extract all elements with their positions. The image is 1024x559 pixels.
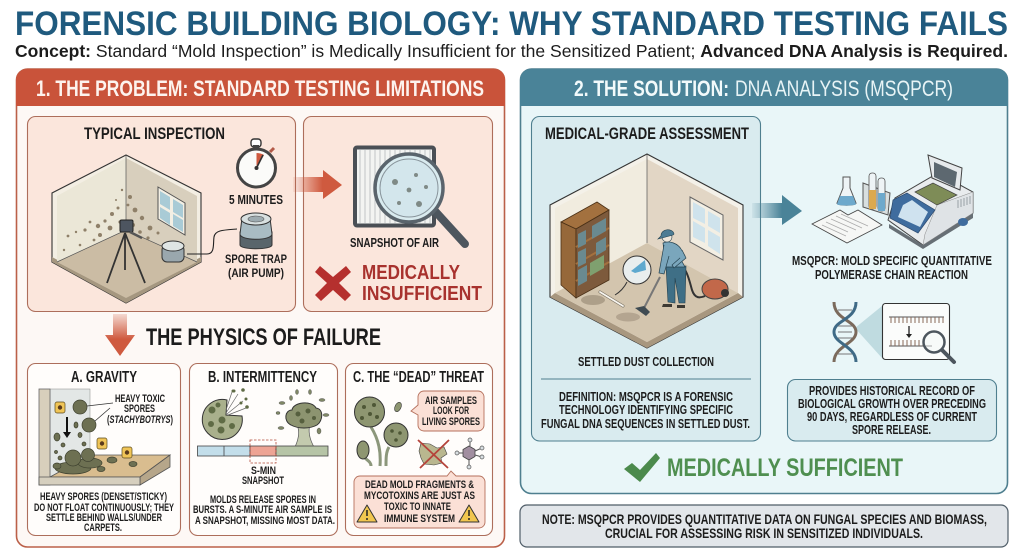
panel frame: problem: [16, 69, 504, 547]
text: historical record box: SPORE RELEASE.: [852, 422, 931, 437]
arrow: trap connector: [187, 229, 237, 254]
icon: green check: [624, 453, 660, 482]
panel: typical inspection: [28, 116, 296, 312]
label: msqpcr definition: [792, 254, 992, 282]
text: intermittency caption: A SNAPSHOT, MISSING MOST DATA.: [195, 515, 335, 527]
panel box: intermittency: [190, 364, 338, 536]
icon: warning right: [459, 505, 479, 522]
note box: CRUCIAL FOR ASSESSING RISK IN SENSITIZED INDIVIDUALS.: [605, 525, 923, 541]
heading: typical inspection: TYPICAL INSPECTION: [84, 125, 225, 143]
label: spore trap: [225, 252, 287, 280]
heading: dead threat: C. THE “DEAD” THREAT: [353, 369, 484, 386]
text: gravity caption: CARPETS.: [84, 522, 122, 534]
icon: mycotoxin molecule: [455, 438, 484, 469]
label: heavy toxic spores: [107, 393, 173, 426]
heading: physics of failure: THE PHYSICS OF FAILURE: [146, 324, 381, 351]
label: heavy toxic spores: SPORES: [124, 403, 155, 415]
label: heavy toxic spores: HEAVY TOXIC: [115, 393, 165, 405]
panel: B intermittency: [190, 364, 338, 536]
callout: dead mold fragments warning: [354, 471, 485, 528]
panel header: problem: [16, 69, 505, 106]
callout: dead mold fragments warning: TOXIC TO INNATE: [384, 501, 451, 513]
icon: red x: [315, 266, 351, 301]
callout: air samples look for living spores: LIVING SPORES: [422, 416, 480, 428]
chart: 5-minute snapshot timeline bar: [198, 440, 328, 463]
label: 5 minutes: 5 MINUTES: [229, 193, 283, 207]
panel box: snapshot: [304, 116, 492, 312]
illustration: spore burst: [202, 388, 249, 439]
label: 5-min snapshot: SNAPSHOT: [242, 475, 284, 487]
label: medically insufficient: INSUFFICIENT: [362, 282, 482, 305]
heading: gravity: A. GRAVITY: [71, 369, 137, 386]
panel frame: solution: [520, 69, 1008, 494]
heading: the solution: 2. THE SOLUTION:: [574, 76, 729, 101]
heading: intermittency: B. INTERMITTENCY: [208, 369, 317, 386]
label: 5-min snapshot: [242, 465, 284, 487]
illustration: room with dust collection: [550, 154, 743, 348]
heading: medical-grade assessment: MEDICAL-GRADE ASSESSMENT: [545, 125, 749, 143]
label: snapshot of air: SNAPSHOT OF AIR: [350, 236, 439, 250]
text: definition: FUNGAL DNA SEQUENCES IN SETTLED DUST.: [541, 416, 750, 431]
label: msqpcr definition: POLYMERASE CHAIN REACTION: [815, 268, 968, 282]
panel box: dead threat: [346, 364, 492, 536]
text: historical record box: [788, 380, 996, 441]
icon: air filter under magnifier: [355, 148, 465, 244]
panel: the problem: [16, 69, 505, 547]
callout: dead mold fragments warning: MYCOTOXINS ARE JUST AS: [364, 490, 475, 502]
icon: spore trap: [240, 213, 272, 249]
label: medically sufficient: MEDICALLY SUFFICIENT: [667, 454, 903, 482]
heading: the solution: [574, 76, 953, 101]
text: gravity caption: DO NOT FLOAT CONTINUOUSLY; THEY: [34, 502, 174, 514]
label: settled dust collection: SETTLED DUST COLLECTION: [578, 354, 714, 369]
panel header: solution: [520, 69, 1008, 106]
label: medically insufficient: MEDICALLY: [362, 261, 460, 284]
arrow: assessment to lab: [752, 195, 802, 225]
text: gravity caption: SETTLE BEHIND WALLS/UNDER: [46, 512, 162, 524]
label: spore trap: SPORE TRAP: [225, 252, 287, 266]
heading: the problem: 1. THE PROBLEM: STANDARD TESTING LIMITATIONS: [36, 76, 484, 101]
text: gravity caption: [34, 491, 174, 534]
callout: air samples look for living spores: [411, 391, 484, 431]
callout: dead mold fragments warning: DEAD MOLD FRAGMENTS &: [365, 479, 474, 491]
panel: A gravity: [28, 364, 180, 536]
panel box: gravity: [28, 364, 180, 536]
arrow: inspection to result: [293, 170, 342, 199]
illustration: room with moldy wall: [52, 155, 201, 303]
callout: air samples look for living spores: LOOK FOR: [433, 405, 469, 417]
panel box: medical-grade: [532, 116, 760, 441]
label: 5-min snapshot: S-MIN: [251, 465, 276, 477]
icon: stopwatch: [238, 139, 276, 187]
subtitle: concept: Concept: Standard “Mold Inspection” is Medically Insufficient for the Sensitized Patient; Advanced DNA Analysis is Required.: [15, 41, 1008, 61]
text: definition: [541, 379, 751, 431]
text: intermittency caption: [193, 494, 335, 527]
callout: dead mold fragments warning: IMMUNE SYSTEM: [384, 513, 455, 525]
panel: the solution: [520, 69, 1008, 494]
panel box: typical inspection: [28, 116, 296, 312]
text: definition: TECHNOLOGY IDENTIFYING SPECIFIC: [559, 402, 733, 417]
panel: snapshot of air: [304, 116, 492, 312]
label: heavy toxic spores: (STACHYBOTRYS): [107, 414, 173, 426]
callout: air samples look for living spores: AIR SAMPLES: [425, 395, 477, 407]
icon: crossed-out dead fragment: [418, 440, 449, 468]
illustration: mold fungi: [354, 397, 408, 466]
text: intermittency caption: MOLDS RELEASE SPORES IN: [210, 494, 316, 506]
panel: medical-grade assessment: [532, 116, 760, 441]
heading: the solution: DNA ANALYSIS (MSQPCR): [735, 76, 953, 101]
label: medically insufficient: [362, 261, 482, 305]
illustration: DNA helix and sequence card: [834, 302, 954, 362]
text: definition: DEFINITION: MSQPCR IS A FORENSIC: [559, 389, 733, 404]
panel: C dead threat: [346, 364, 492, 536]
illustration: mold colony burst: [276, 390, 329, 447]
icon: warning left: [357, 505, 377, 522]
text: intermittency caption: BURSTS. A S-MINUTE AIR SAMPLE IS: [193, 504, 332, 516]
illustration: lab equipment: [812, 155, 973, 249]
arrow: down to physics: [105, 314, 135, 356]
text: gravity caption: HEAVY SPORES (DENSET/STICKY): [40, 491, 167, 503]
note box: [520, 505, 1008, 547]
label: spore trap: (AIR PUMP): [228, 266, 284, 280]
illustration: spores settling: [39, 389, 170, 485]
